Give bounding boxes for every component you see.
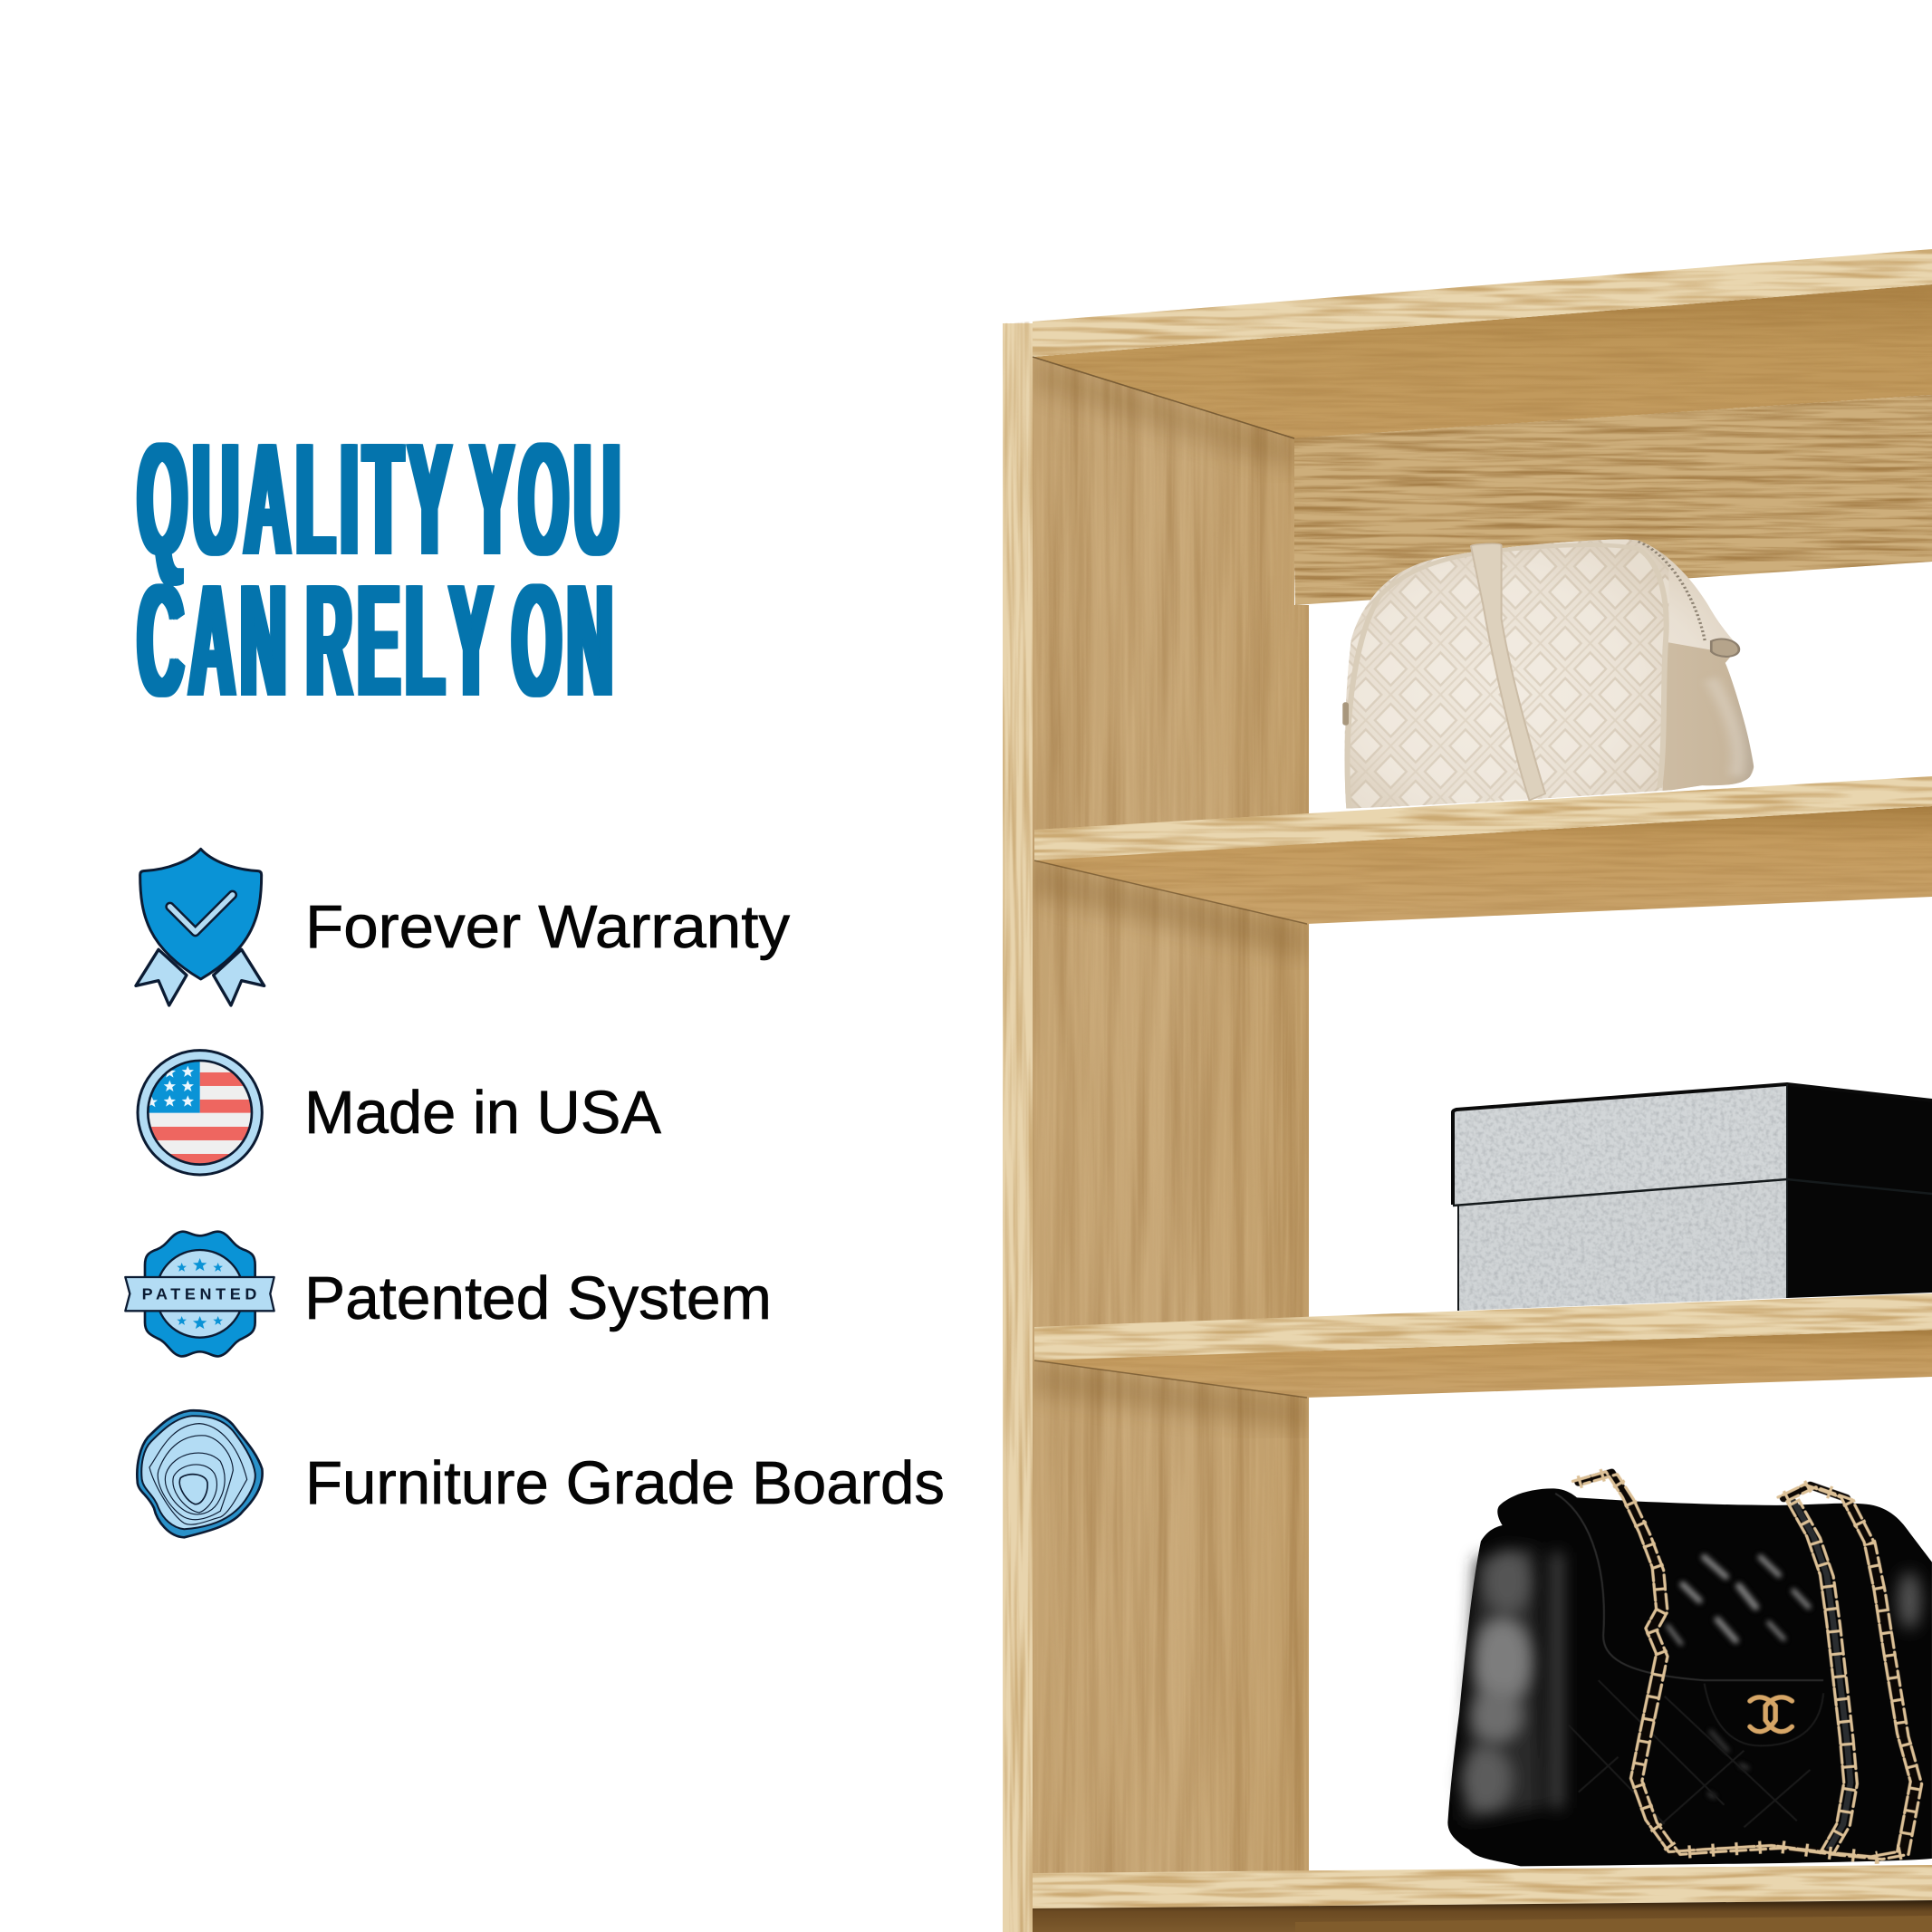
icon: patented badge: PATENTED <box>142 1284 256 1302</box>
shelf fronts <box>1033 249 1932 1908</box>
icon: patented badge <box>125 1232 274 1356</box>
side panel <box>1033 357 1309 1932</box>
shelf unit <box>996 245 1932 1932</box>
third shelf underside <box>1034 1330 1932 1398</box>
title: QUALITY YOU <box>138 409 626 589</box>
label: patented system: Patented System <box>304 1264 772 1332</box>
label: furniture grade boards: Furniture Grade Boards <box>305 1449 945 1517</box>
icon: wood rings <box>137 1410 263 1537</box>
storage box <box>1449 1078 1932 1315</box>
bottom shelf shadow <box>1033 1900 1932 1932</box>
label: forever warranty: Forever Warranty <box>305 893 791 961</box>
second shelf underside <box>1034 806 1932 924</box>
black quilted handbag <box>1447 1472 1932 1866</box>
icon: USA flag badge <box>138 1051 262 1175</box>
gold interlocking logo <box>1750 1697 1792 1732</box>
title: CAN RELY ON <box>138 551 619 730</box>
icon: warranty shield <box>136 849 264 1005</box>
box lid front <box>1453 1084 1787 1205</box>
box dark side <box>1787 1084 1932 1298</box>
label: made in usa: Made in USA <box>304 1079 661 1147</box>
top shelf underside <box>1033 284 1932 438</box>
cream quilted handbag <box>1337 536 1763 813</box>
box body front <box>1458 1179 1787 1311</box>
left post edge <box>1003 323 1033 1932</box>
back rail <box>1292 395 1932 605</box>
chain strap <box>1572 1472 1922 1860</box>
feature list <box>304 893 945 1517</box>
title <box>136 409 626 730</box>
